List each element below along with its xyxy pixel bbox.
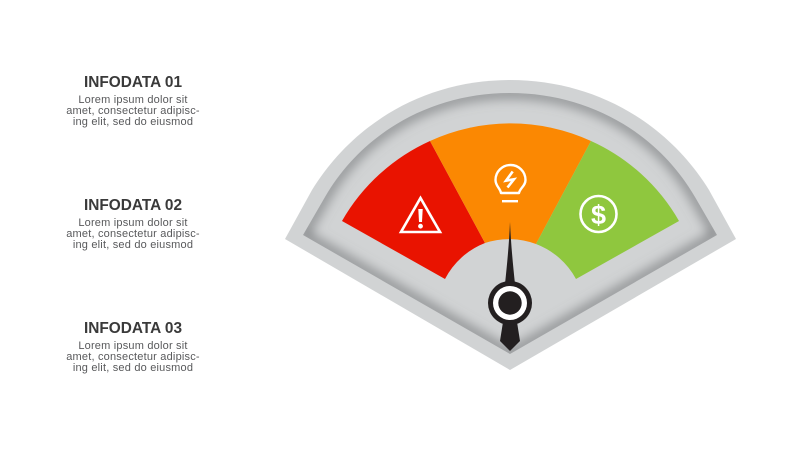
body text: infodata 02: ing elit, sed do eiusmod — [73, 239, 193, 251]
text block: infodata 03 — [66, 320, 200, 374]
body text: infodata 01 — [66, 94, 200, 128]
heading: infodata 01: INFODATA 01 — [84, 74, 182, 91]
segment: red — [342, 141, 485, 279]
segment: green — [536, 141, 679, 279]
heading: infodata 03: INFODATA 03 — [84, 320, 182, 337]
icon: dollar coin: $ — [591, 200, 606, 230]
segment: orange — [430, 123, 591, 244]
body text: infodata 03: Lorem ipsum dolor sit — [78, 340, 188, 352]
icon: warning triangle — [401, 198, 440, 232]
needle — [488, 222, 532, 351]
gauge inner recessed panel — [303, 93, 717, 354]
body text: infodata 01: ing elit, sed do eiusmod — [73, 116, 193, 128]
body text: infodata 03: ing elit, sed do eiusmod — [73, 362, 193, 374]
icon: dollar coin — [580, 196, 616, 232]
body text: infodata 01: Lorem ipsum dolor sit — [78, 94, 188, 106]
body text: infodata 02: Lorem ipsum dolor sit — [78, 217, 188, 229]
heading: infodata 02: INFODATA 02 — [84, 197, 182, 214]
body text: infodata 02 — [66, 217, 200, 251]
text block: infodata 02 — [66, 197, 200, 251]
body text: infodata 01: amet, consectetur adipisc- — [66, 105, 200, 117]
icon: light bulb — [496, 165, 526, 202]
gauge — [285, 80, 736, 370]
gauge outer frame — [285, 80, 736, 370]
body text: infodata 03: amet, consectetur adipisc- — [66, 351, 200, 363]
body text: infodata 03 — [66, 340, 200, 374]
text block: infodata 01 — [66, 74, 200, 128]
body text: infodata 02: amet, consectetur adipisc- — [66, 228, 200, 240]
